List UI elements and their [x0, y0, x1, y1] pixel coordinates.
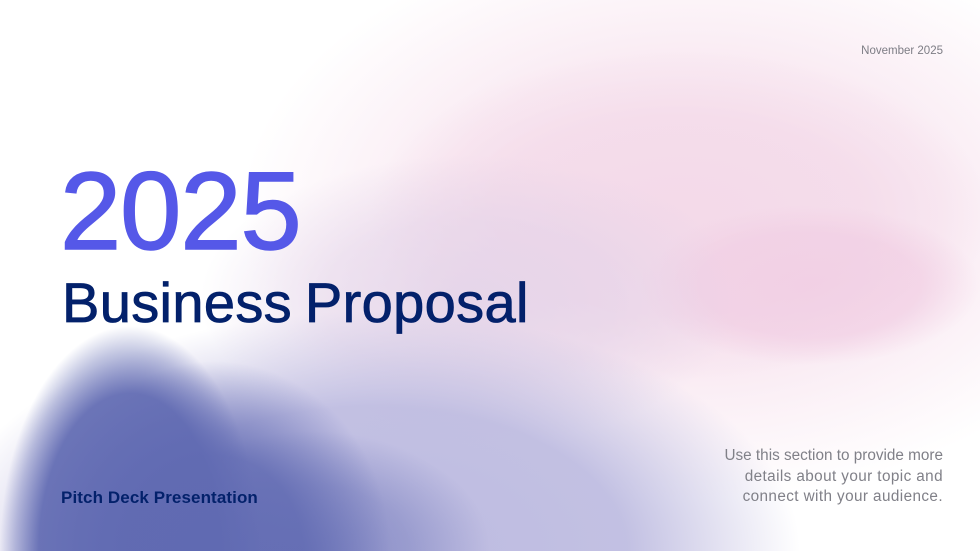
- description text: Use this section to provide more: [724, 447, 943, 464]
- description text: connect with your audience.: [743, 488, 943, 505]
- description text: details about your topic and: [745, 468, 943, 484]
- description text: [724, 447, 943, 505]
- year heading: 2025: [60, 150, 301, 273]
- date label: November 2025: [861, 45, 943, 57]
- title: Business Proposal: [62, 271, 529, 334]
- subtitle: Pitch Deck Presentation: [61, 488, 258, 507]
